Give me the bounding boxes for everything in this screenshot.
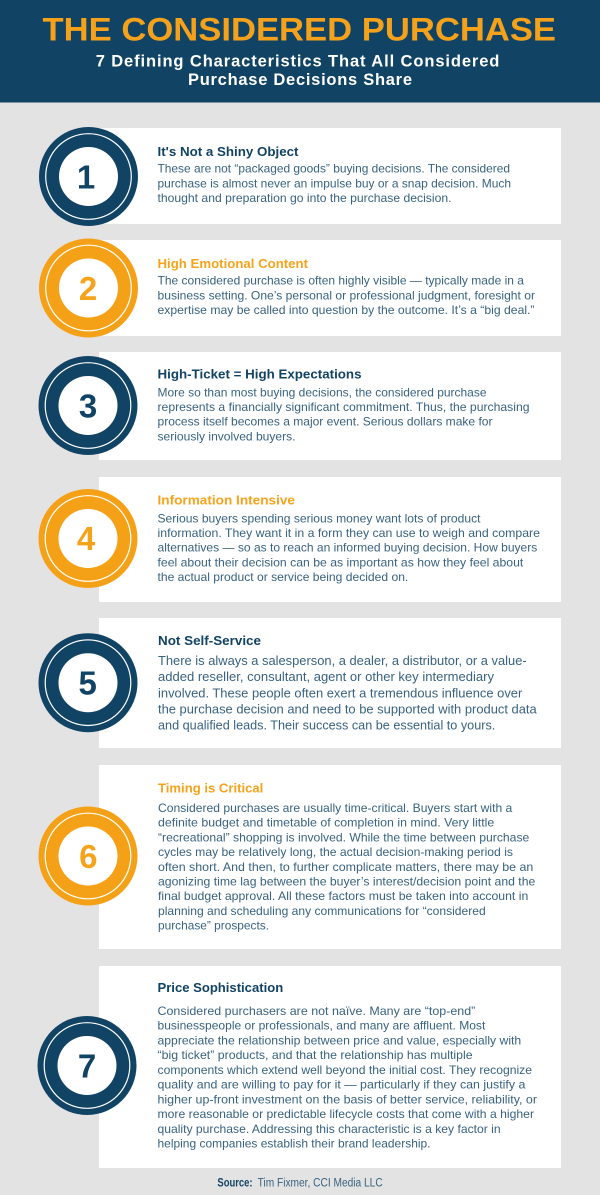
body text: involved. These people often exert a tremendous influence over (158, 685, 523, 700)
body text: expertise may be called into question by the outcome. It’s a “big deal.” (158, 303, 535, 317)
body text: appreciate the relationship between price and value, especially with (158, 1033, 521, 1047)
panel: 6 Timing is Critical (38, 765, 561, 949)
badge: number 1: 1 (77, 158, 95, 196)
heading: Price Sophistication (158, 980, 283, 995)
badge: number 2 (39, 238, 138, 338)
body text: added reseller, consultant, agent or other key intermediary (158, 669, 495, 684)
body text (158, 274, 535, 317)
header banner (0, 0, 600, 102)
body text: process itself becomes a major event. Serious dollars make for (158, 415, 493, 429)
body text: represents a financially significant commitment. Thus, the purchasing (158, 400, 530, 414)
badge: number 1 (39, 127, 138, 226)
body text: final budget approval. All these factors must be taken into account in (158, 889, 528, 903)
body text: The considered purchase is often highly visible — typically made in a (158, 274, 524, 288)
body text: alternatives — so as to reach an informed buying decision. How buyers (158, 541, 537, 555)
badge: number 2: 2 (79, 270, 97, 307)
body text: “big ticket” products, and that the relationship has multiple (158, 1048, 473, 1062)
body text: thought and preparation go into the purchase decision. (158, 191, 452, 205)
body text: agonizing time lag between the buyer’s interest/decision point and the (158, 874, 536, 888)
body text: “recreational” shopping is involved. While the time between purchase (158, 830, 530, 844)
body text: businesspeople or professionals, and many are affluent. Most (158, 1019, 486, 1033)
body text: Serious buyers spending serious money want lots of product (158, 511, 481, 525)
body text: More so than most buying decisions, the considered purchase (158, 385, 487, 399)
subtitle: Purchase Decisions Share (188, 71, 412, 89)
panel: 5 Not Self-Service (38, 618, 561, 748)
panel: 3 High-Ticket = High Expectations (38, 352, 561, 460)
badge: number 5: 5 (79, 664, 97, 702)
panel: 1 It's Not a Shiny Object (39, 127, 561, 226)
body text: higher up-front investment on the basis of better service, reliability, or (158, 1092, 537, 1106)
body text: quality purchase. Addressing this characteristic is a key factor in (158, 1122, 501, 1136)
body text (158, 385, 530, 443)
body text: feel about their decision can be as important as how they feel about (158, 555, 524, 569)
subtitle (96, 53, 499, 89)
body text: purchase is almost never an impulse buy or a snap decision. Much (158, 176, 511, 190)
body text: the actual product or service being decided on. (158, 570, 408, 584)
body text: There is always a salesperson, a dealer, a distributor, or a value- (158, 653, 527, 668)
badge: number 4: 4 (77, 520, 96, 557)
badge: number 6 (38, 806, 138, 906)
subtitle: 7 Defining Characteristics That All Considered (96, 53, 499, 71)
heading: High-Ticket = High Expectations (158, 366, 362, 381)
badge: number 5 (38, 633, 138, 732)
heading: Information Intensive (158, 493, 295, 508)
body text: Considered purchasers are not naïve. Many are “top-end” (158, 1004, 475, 1018)
panel: 2 High Emotional Content (39, 238, 561, 338)
heading: Not Self-Service (158, 633, 261, 648)
body text (158, 653, 538, 733)
body text: definite budget and timetable of completion in mind. Very little (158, 816, 495, 830)
body text (158, 162, 511, 205)
body text: the purchase decision and need to be supported with product data (158, 702, 538, 716)
body text (158, 1004, 537, 1150)
body text: quality and are willing to pay for it — particularly if they can justify a (158, 1078, 526, 1092)
body text: These are not “packaged goods” buying decisions. The considered (158, 162, 510, 176)
heading: High Emotional Content (158, 256, 309, 271)
body text: information. They want it in a form they can use to weigh and compare (158, 526, 540, 540)
title: THE CONSIDERED PURCHASE (42, 12, 556, 48)
panel: 7 Price Sophistication (38, 966, 561, 1168)
body text (158, 511, 540, 584)
heading: Timing is Critical (158, 781, 263, 796)
body text: often short. And then, to further complicate matters, there may be an (158, 860, 533, 874)
body text: seriously involved buyers. (158, 429, 296, 443)
body text: components which extend well beyond the initial cost. They recognize (158, 1063, 532, 1077)
body text: purchase” prospects. (158, 919, 269, 933)
body text: and qualified leads. Their success can be essential to yours. (158, 718, 495, 733)
badge: number 4 (38, 489, 138, 588)
body text (158, 801, 536, 933)
badge: number 6: 6 (79, 838, 97, 875)
source credit: Source: (217, 1178, 253, 1190)
body text: cycles may be relatively long, the actual decision-making period is (158, 845, 513, 859)
body text: helping companies establish their brand leadership. (158, 1136, 431, 1150)
body text: Considered purchases are usually time-critical. Buyers start with a (158, 801, 513, 815)
body text: planning and scheduling any communications for “considered (158, 904, 486, 918)
badge: number 3: 3 (79, 387, 97, 424)
badge: number 3 (38, 356, 138, 455)
source credit (217, 1178, 383, 1190)
panel: 4 Information Intensive (38, 477, 561, 602)
badge: number 7 (38, 1016, 136, 1115)
body text: more reasonable or predictable lifecycle costs that come with a higher (158, 1107, 534, 1121)
heading: It's Not a Shiny Object (158, 144, 299, 159)
badge: number 7: 7 (78, 1048, 96, 1084)
body text: business setting. One’s personal or professional judgment, foresight or (158, 288, 535, 302)
source credit: Tim Fixmer, CCI Media LLC (258, 1178, 383, 1190)
